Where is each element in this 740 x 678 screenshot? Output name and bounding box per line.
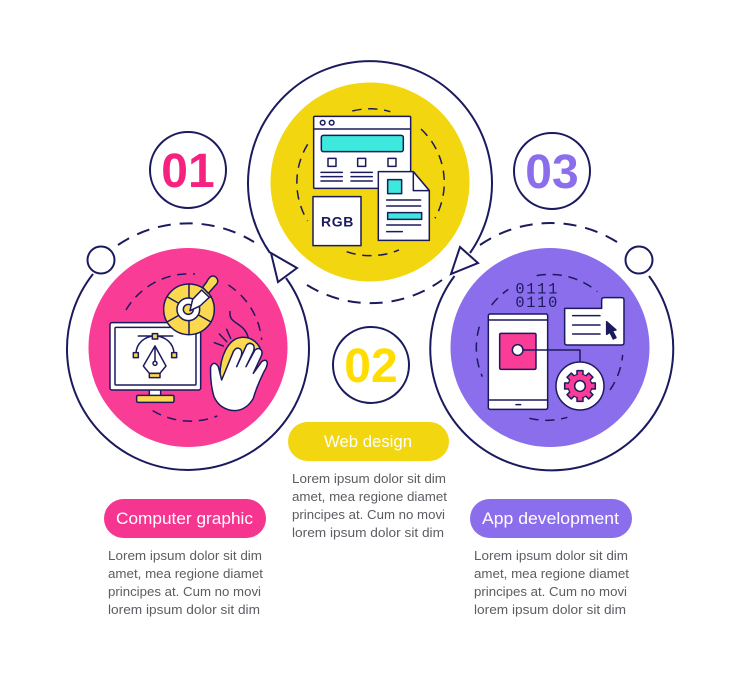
text block: web design: principes at. Cum no movi: [292, 507, 445, 522]
dashed arc: app development: [480, 223, 617, 245]
icon: phone, folder and gear: 0111: [515, 280, 557, 298]
text block: web design: amet, mea regione diamet: [292, 489, 447, 504]
dashed arc: computer graphic: [118, 223, 254, 245]
number badge 03: [514, 133, 590, 209]
number badge 01: 01: [161, 145, 215, 198]
text block: app development: principes at. Cum no movi: [474, 584, 627, 599]
arrow: into app development: [451, 247, 478, 274]
number badge 02: [333, 327, 409, 403]
text block: computer graphic: lorem ipsum dolor sit dim: [108, 602, 260, 617]
arrow: into web design: [271, 253, 297, 282]
text block: web design: [292, 471, 447, 540]
dashed arc: web design: [307, 280, 442, 303]
number badge 02: 02: [344, 340, 398, 393]
number badge 03: 03: [525, 146, 579, 199]
label pill: computer graphic: [104, 499, 266, 538]
panel: web design circle: [248, 61, 492, 303]
text block: computer graphic: amet, mea regione diamet: [108, 566, 263, 581]
panel: computer graphic circle: [67, 223, 309, 470]
icon: phone, folder and gear: [476, 274, 624, 420]
panel: app development circle: [430, 223, 673, 470]
icon: phone, folder and gear: 0110: [515, 294, 557, 312]
label pill: web design: [288, 422, 449, 461]
icon: browser, document and RGB swatch: [297, 109, 444, 256]
text block: web design: Lorem ipsum dolor sit dim: [292, 471, 446, 486]
text block: app development: [474, 548, 629, 617]
text block: app development: amet, mea regione diamet: [474, 566, 629, 581]
outer ring: app development: [430, 276, 673, 470]
node: app development: [626, 246, 652, 274]
text block: computer graphic: Lorem ipsum dolor sit dim: [108, 548, 262, 563]
label pill: app development: App development: [482, 509, 619, 528]
label pill: web design: Web design: [324, 432, 412, 451]
number badge 01: [150, 132, 226, 208]
outer ring: computer graphic: [67, 274, 309, 470]
icon: browser, document and RGB swatch: RGB: [321, 214, 353, 230]
text block: web design: lorem ipsum dolor sit dim: [292, 525, 444, 540]
text block: app development: Lorem ipsum dolor sit dim: [474, 548, 628, 563]
text block: computer graphic: principes at. Cum no movi: [108, 584, 261, 599]
text block: app development: lorem ipsum dolor sit dim: [474, 602, 626, 617]
node: computer graphic: [88, 246, 114, 274]
icon: monitor, colour wheel and mouse: [110, 274, 267, 421]
outer ring: web design: [248, 61, 492, 253]
label pill: app development: [470, 499, 632, 538]
label pill: computer graphic: Computer graphic: [116, 509, 254, 528]
text block: computer graphic: [108, 548, 263, 617]
